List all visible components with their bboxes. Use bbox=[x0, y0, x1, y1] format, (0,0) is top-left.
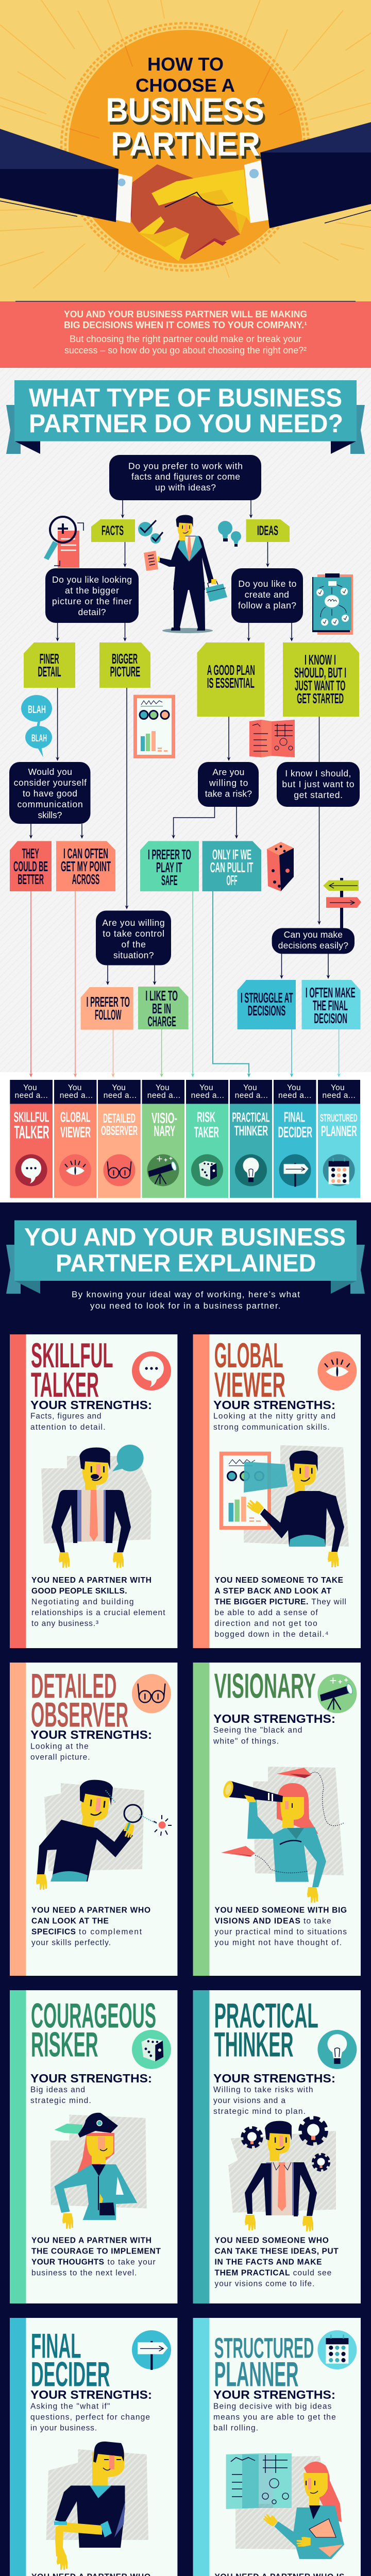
strengths text bbox=[30, 2072, 152, 2105]
question: take control: Are you willing bbox=[102, 918, 165, 928]
result: skillful talker: SKILLFUL bbox=[14, 1109, 49, 1125]
question: take control: situation? bbox=[113, 950, 154, 960]
partner advice text: to take your bbox=[107, 2258, 156, 2267]
result: final decider: You bbox=[287, 1083, 301, 1092]
result: risk taker bbox=[186, 1080, 228, 1198]
question: take a risk: take a risk? bbox=[205, 788, 252, 799]
answer: struggle at decisions: DECISIONS bbox=[248, 1003, 285, 1019]
answer: ideas: IDEAS bbox=[257, 522, 278, 538]
strengths text: in your business. bbox=[30, 2424, 97, 2433]
question: decisions easily: decisions easily? bbox=[278, 940, 348, 951]
answer: a good plan: IS ESSENTIAL bbox=[207, 675, 255, 691]
question: create and follow a plan: create and bbox=[245, 589, 289, 600]
card heading: FINAL bbox=[31, 2326, 81, 2365]
strengths text: Looking at the nitty gritty and bbox=[213, 1412, 335, 1421]
question: communication skills bbox=[9, 762, 91, 824]
strengths text: YOUR STRENGTHS: bbox=[30, 1398, 152, 1412]
banner: what type of partner: PARTNER DO YOU NEED? bbox=[29, 409, 343, 438]
answer: ideas bbox=[246, 519, 290, 542]
partner advice text bbox=[31, 1906, 150, 1947]
card heading bbox=[31, 2326, 110, 2394]
result: risk taker: RISK bbox=[197, 1109, 215, 1125]
illustration: man thinking bbox=[46, 2442, 148, 2570]
partner advice text: GOOD PEOPLE SKILLS. bbox=[31, 1587, 127, 1596]
answer: they could be better: THEY bbox=[22, 845, 39, 861]
result: global viewer: VIEWER bbox=[60, 1124, 91, 1141]
explained intro text: you need to look for in a business partner. bbox=[90, 1301, 281, 1311]
answer: bigger picture: PICTURE bbox=[110, 664, 140, 680]
question: take control bbox=[96, 911, 171, 965]
answer: they could be better: BETTER bbox=[18, 871, 44, 887]
strengths text: Facts, figures and bbox=[30, 1412, 101, 1421]
answer: play it safe: I PREFER TO bbox=[148, 846, 191, 862]
partner advice text: IN THE FACTS AND MAKE bbox=[214, 2258, 322, 2267]
card: courageous risker bbox=[10, 1990, 177, 2303]
card: skillful talker: SKILLFUL bbox=[31, 1336, 113, 1375]
result: practical thinker: THINKER bbox=[234, 1123, 268, 1139]
strengths text bbox=[213, 2072, 335, 2116]
partner advice text: be able to add a sense of bbox=[214, 1608, 318, 1617]
answer: just want to get started bbox=[283, 642, 359, 717]
question: facts or ideas: up with ideas? bbox=[155, 482, 216, 493]
card heading bbox=[31, 1336, 113, 1404]
question: know I should: but I just want to bbox=[282, 779, 355, 789]
illustration: presenter with chart bbox=[220, 1445, 349, 1567]
question: bigger picture or finer detail: at the bigger bbox=[65, 585, 119, 596]
question: take control: to take control bbox=[103, 928, 164, 939]
intro band: But choosing the right partner could make or break your bbox=[70, 334, 301, 344]
hero dotted ring bbox=[61, 23, 309, 270]
icon: light bulbs bbox=[218, 521, 241, 547]
result: skillful talker bbox=[10, 1080, 53, 1198]
strengths text: attention to detail. bbox=[30, 1423, 105, 1432]
card heading: RISKER bbox=[31, 2025, 98, 2064]
question: know I should: get started. bbox=[294, 790, 343, 800]
flowchart background bbox=[0, 368, 371, 1072]
partner advice text bbox=[214, 2236, 339, 2289]
card: global viewer: GLOBAL bbox=[214, 1336, 283, 1375]
explained intro text: By knowing your ideal way of working, here’s what bbox=[72, 1290, 300, 1299]
strengths text: YOUR STRENGTHS: bbox=[30, 2388, 152, 2401]
strengths text bbox=[30, 2388, 152, 2433]
answer: a good plan: A GOOD PLAN bbox=[207, 662, 255, 678]
hero sunburst rays bbox=[0, 0, 371, 289]
results background bbox=[0, 1072, 371, 1202]
result: risk taker: TAKER bbox=[194, 1124, 219, 1141]
question: facts or ideas: facts and figures or come bbox=[131, 471, 240, 482]
question: bigger picture or finer detail bbox=[45, 568, 139, 623]
partner advice text: YOU NEED SOMEONE WHO bbox=[214, 2236, 329, 2245]
result: visionary bbox=[142, 1080, 184, 1198]
strengths text: Seeing the "black and bbox=[213, 1726, 302, 1735]
strengths text: strong communication skills. bbox=[213, 1423, 330, 1432]
partner advice text: bogged down in the detail.⁴ bbox=[214, 1630, 328, 1639]
partner advice text bbox=[31, 2236, 161, 2277]
partner advice text: THEM PRACTICAL bbox=[214, 2269, 290, 2277]
result: risk taker: You bbox=[199, 1083, 213, 1092]
card heading: TALKER bbox=[31, 1365, 99, 1404]
answer: finer detail: DETAIL bbox=[38, 664, 61, 680]
strengths text: white" of things. bbox=[213, 1737, 279, 1745]
strengths text: YOUR STRENGTHS: bbox=[213, 1712, 335, 1725]
icon: clipboard plan bbox=[312, 573, 353, 635]
card icon bbox=[132, 2030, 171, 2069]
strengths text: Looking at the bbox=[30, 1742, 89, 1751]
hero inner rays bbox=[70, 46, 296, 138]
result: detailed observer: You bbox=[112, 1083, 126, 1092]
icon: report chart bbox=[133, 695, 175, 758]
answer: only if we can pull it off: OFF bbox=[227, 872, 238, 888]
hero orange circle bbox=[69, 30, 302, 264]
card icon bbox=[317, 1674, 357, 1713]
answer: like to be in charge: I LIKE TO bbox=[145, 988, 178, 1004]
flow arrowheads bbox=[29, 514, 330, 985]
main title: PARTNER bbox=[113, 128, 262, 166]
partner advice text bbox=[31, 1576, 165, 1628]
card: courageous risker: COURAGEOUS bbox=[31, 1996, 156, 2035]
banner: partner explained: PARTNER EXPLAINED bbox=[56, 1250, 316, 1277]
partner advice text bbox=[214, 1906, 347, 1947]
strengths text: strategic mind to plan. bbox=[213, 2107, 306, 2116]
partner advice text: to take bbox=[303, 1917, 331, 1926]
question: communication skills: Would you bbox=[28, 767, 72, 777]
result: detailed observer: OBSERVER bbox=[101, 1124, 138, 1138]
illustration: woman in hat bbox=[50, 2113, 147, 2229]
result: detailed observer: need a... bbox=[104, 1091, 137, 1100]
result: visionary: VISIO- bbox=[151, 1110, 177, 1127]
answer: get my point across: GET MY POINT bbox=[61, 858, 111, 874]
answer: like to be in charge bbox=[138, 987, 189, 1029]
question: bigger picture or finer detail: picture or the finer bbox=[52, 596, 132, 606]
partner advice text: to any business.³ bbox=[31, 1619, 98, 1628]
flow connector lines bbox=[31, 500, 339, 1075]
answer: a good plan bbox=[197, 642, 265, 717]
handshake illustration bbox=[130, 164, 250, 261]
card: final decider bbox=[10, 2318, 177, 2576]
result: skillful talker: You bbox=[23, 1083, 37, 1092]
explained intro text bbox=[72, 1290, 300, 1311]
strengths text: your visions and a bbox=[213, 2096, 285, 2105]
result: final decider: FINAL bbox=[284, 1109, 305, 1125]
partner advice text: to complement bbox=[79, 1928, 142, 1936]
result: final decider: need a... bbox=[278, 1091, 311, 1100]
card heading: THINKER bbox=[214, 2025, 294, 2064]
answer: prefer to follow bbox=[81, 987, 133, 1030]
question: decisions easily bbox=[272, 928, 355, 954]
strengths text: means you are able to get the bbox=[213, 2413, 336, 2421]
partner advice text: THE BIGGER PICTURE. bbox=[214, 1598, 308, 1606]
partner advice text: CAN TAKE THESE IDEAS, PUT bbox=[214, 2247, 339, 2256]
answer: make the final decision bbox=[302, 980, 361, 1029]
strengths text: Willing to take risks with bbox=[213, 2086, 313, 2094]
card: structured planner bbox=[193, 2318, 361, 2576]
result: practical thinker bbox=[230, 1080, 272, 1198]
card: detailed observer bbox=[10, 1663, 177, 1976]
strengths text: YOUR STRENGTHS: bbox=[213, 2072, 335, 2085]
card heading bbox=[214, 2331, 314, 2394]
partner advice text: YOU NEED A PARTNER WITH bbox=[31, 2236, 151, 2245]
partner advice text: you might not have thought of. bbox=[214, 1938, 342, 1947]
question: take a risk: Are you bbox=[212, 767, 244, 777]
answer: play it safe: SAFE bbox=[161, 872, 177, 888]
answer: facts bbox=[91, 519, 135, 542]
intro band bbox=[0, 301, 371, 368]
result: skillful talker: need a... bbox=[14, 1091, 48, 1100]
partner advice text: YOUR THOUGHTS bbox=[31, 2258, 104, 2267]
question: communication skills: to have good bbox=[23, 788, 77, 799]
right sleeve bbox=[244, 122, 371, 228]
card icon bbox=[132, 1674, 171, 1713]
main title: HOW TO bbox=[147, 54, 224, 75]
question: take a risk bbox=[198, 762, 259, 807]
partner advice text: SPECIFICS bbox=[31, 1928, 76, 1936]
question: facts or ideas bbox=[109, 455, 261, 500]
icon: folded map plan bbox=[249, 720, 295, 757]
card icon bbox=[132, 2330, 171, 2370]
question: know I should bbox=[277, 762, 360, 807]
strengths text bbox=[30, 1728, 152, 1761]
card heading bbox=[31, 1996, 156, 2064]
result: practical thinker: You bbox=[243, 1083, 257, 1092]
figure: businessman bbox=[144, 515, 227, 633]
partner advice text: your practical mind to situations bbox=[214, 1928, 347, 1936]
result: global viewer: need a... bbox=[60, 1091, 93, 1100]
banner: partner explained: YOU AND YOUR BUSINESS bbox=[24, 1224, 346, 1251]
answer: only if we can pull it off bbox=[203, 841, 261, 891]
partner advice text: CAN LOOK AT THE bbox=[31, 1917, 109, 1926]
result: visionary: You bbox=[156, 1083, 170, 1092]
question: bigger picture or finer detail: Do you like looking bbox=[52, 574, 132, 585]
result: final decider bbox=[274, 1080, 316, 1198]
strengths text: YOUR STRENGTHS: bbox=[213, 1398, 335, 1412]
card heading: DECIDER bbox=[31, 2354, 110, 2394]
answer: prefer to follow: FOLLOW bbox=[95, 1007, 122, 1023]
result: structured planner bbox=[318, 1080, 360, 1198]
strengths text bbox=[30, 1398, 152, 1432]
answer: they could be better bbox=[10, 841, 52, 891]
partner advice text: YOU NEED SOMEONE WITH BIG bbox=[214, 1906, 347, 1914]
partner advice text: YOU NEED A PARTNER WITH bbox=[31, 1576, 151, 1585]
result: global viewer: GLOBAL bbox=[60, 1109, 90, 1125]
banner: partner explained bbox=[6, 1221, 365, 1294]
question: create and follow a plan: follow a plan? bbox=[238, 600, 296, 611]
strengths text: overall picture. bbox=[30, 1753, 90, 1761]
answer: prefer to follow: I PREFER TO bbox=[87, 994, 130, 1010]
result arrow tips bbox=[29, 1073, 341, 1077]
card: practical thinker bbox=[193, 1990, 361, 2303]
icon: red dice bbox=[267, 842, 294, 891]
answer: just want to get started: I KNOW I bbox=[305, 652, 336, 668]
card icon bbox=[317, 2030, 357, 2069]
icon: magnifier over document bbox=[44, 517, 83, 568]
card icon bbox=[317, 1351, 357, 1391]
strengths text: questions, perfect for change bbox=[30, 2413, 150, 2421]
result: structured planner: need a... bbox=[323, 1091, 356, 1100]
icon: check marks bbox=[138, 520, 163, 544]
question: communication skills: skills? bbox=[38, 810, 62, 820]
answer: only if we can pull it off: ONLY IF WE bbox=[212, 846, 251, 862]
partner advice text: relationships is a crucial element bbox=[31, 1608, 165, 1617]
card: skillful talker bbox=[10, 1334, 177, 1648]
partner advice text: your visions come to life. bbox=[214, 2279, 314, 2289]
question: create and follow a plan: Do you like to bbox=[238, 579, 296, 589]
result connector stubs bbox=[31, 1071, 339, 1075]
answer: get my point across: I CAN OFTEN bbox=[63, 845, 108, 861]
partner advice text: business to the next level. bbox=[31, 2269, 137, 2277]
strengths text: Big ideas and bbox=[30, 2086, 85, 2094]
card icon bbox=[132, 1351, 171, 1391]
icon: signpost bbox=[323, 878, 361, 928]
hero section background bbox=[0, 0, 371, 301]
illustration: thinker with gears bbox=[228, 2120, 336, 2231]
result: detailed observer: DETAILED bbox=[103, 1111, 136, 1126]
illustration: man with magnifier bbox=[36, 1778, 172, 1890]
card heading bbox=[31, 1666, 128, 1734]
card heading: VIEWER bbox=[214, 1365, 285, 1404]
result: risk taker: need a... bbox=[191, 1091, 224, 1100]
answer: play it safe: PLAY IT bbox=[156, 859, 182, 875]
answer: only if we can pull it off: CAN PULL IT bbox=[210, 859, 253, 875]
question: know I should: I know I should, bbox=[285, 768, 351, 778]
left sleeve bbox=[0, 129, 132, 223]
intro band: success – so how do you go about choosing the right one?² bbox=[64, 345, 307, 355]
main title bbox=[106, 54, 266, 166]
answer: they could be better: COULD BE bbox=[13, 858, 48, 874]
question: communication skills: consider yourself bbox=[14, 777, 87, 788]
main title: CHOOSE A bbox=[136, 75, 235, 96]
answer: finer detail: FINER bbox=[40, 651, 59, 667]
partner advice text: THE COURAGE TO IMPLEMENT bbox=[31, 2247, 161, 2256]
card heading: DETAILED bbox=[31, 1666, 116, 1705]
strengths text: Being decisive with big ideas bbox=[213, 2402, 332, 2411]
illustration: woman with telescope bbox=[221, 1767, 344, 1903]
result: global viewer: You bbox=[68, 1083, 81, 1092]
answer: get my point across: ACROSS bbox=[72, 871, 99, 887]
partner advice text: Negotiating and building bbox=[31, 1598, 134, 1606]
partner advice text: YOU NEED A PARTNER WHO bbox=[31, 1906, 150, 1914]
card heading bbox=[214, 1996, 318, 2064]
question: take control: of the bbox=[122, 939, 146, 950]
answer: facts: FACTS bbox=[102, 522, 124, 538]
icon: blah speech bubbles: BLAH bbox=[28, 704, 46, 716]
answer: struggle at decisions: I STRUGGLE AT bbox=[241, 990, 293, 1006]
illustration: woman with plan bbox=[226, 2453, 344, 2559]
answer: bigger picture: BIGGER bbox=[112, 651, 138, 667]
main title: BUSINESS bbox=[108, 94, 266, 132]
banner: what type of partner: WHAT TYPE OF BUSINESS bbox=[29, 383, 342, 412]
question: communication skills: communication bbox=[18, 799, 83, 809]
illustration: talker man bbox=[41, 1445, 151, 1568]
icon: blah speech bubbles: BLAH bbox=[31, 733, 47, 744]
strengths text bbox=[213, 2388, 336, 2433]
strengths text: ball rolling. bbox=[213, 2424, 258, 2433]
partner advice text: direction and not get too bbox=[214, 1619, 317, 1628]
strengths text: YOUR STRENGTHS: bbox=[30, 1728, 152, 1741]
partner advice text: They will bbox=[311, 1598, 346, 1606]
answer: like to be in charge: BE IN bbox=[152, 1001, 171, 1016]
banner: what type of partner bbox=[6, 380, 365, 454]
question: take a risk: willing to bbox=[209, 778, 248, 788]
result: global viewer bbox=[54, 1080, 96, 1198]
card: detailed observer: OBSERVER bbox=[31, 1695, 128, 1734]
intro band: BIG DECISIONS WHEN IT COMES TO YOUR COMPANY.¹ bbox=[64, 320, 307, 330]
result: practical thinker: PRACTICAL bbox=[232, 1110, 270, 1125]
partner advice text: VISIONS AND IDEAS bbox=[214, 1917, 300, 1926]
answer: struggle at decisions bbox=[238, 980, 296, 1029]
strengths text: YOUR STRENGTHS: bbox=[213, 2388, 335, 2401]
intro band: YOU AND YOUR BUSINESS PARTNER WILL BE MAKING bbox=[64, 309, 307, 319]
main title: PARTNER bbox=[111, 125, 260, 163]
question: bigger picture or finer detail: detail? bbox=[78, 607, 106, 617]
result: visionary: NARY bbox=[154, 1123, 175, 1140]
icon: blah speech bubbles bbox=[21, 695, 52, 757]
strengths text bbox=[213, 1712, 335, 1745]
result: visionary: need a... bbox=[147, 1091, 180, 1100]
partner advice text: YOU NEED SOMEONE TO TAKE bbox=[214, 1576, 343, 1585]
result: detailed observer bbox=[98, 1080, 141, 1198]
answer: finer detail bbox=[24, 642, 75, 688]
strengths text: strategic mind. bbox=[30, 2096, 91, 2105]
strengths text: YOUR STRENGTHS: bbox=[30, 2072, 152, 2085]
strengths text bbox=[213, 1398, 335, 1432]
result: practical thinker: need a... bbox=[235, 1091, 268, 1100]
partner advice text: A STEP BACK AND LOOK AT bbox=[214, 1587, 332, 1596]
question: create and follow a plan bbox=[231, 568, 303, 623]
card: global viewer bbox=[193, 1334, 361, 1648]
partner advice text bbox=[214, 1576, 346, 1639]
question: facts or ideas: Do you prefer to work with bbox=[128, 461, 243, 471]
partner advice text: your skills perfectly. bbox=[31, 1938, 111, 1947]
strengths text: Asking the "what if" bbox=[30, 2402, 110, 2411]
result: skillful talker: TALKER bbox=[14, 1123, 49, 1143]
partner advice text: could see bbox=[293, 2269, 331, 2277]
answer: play it safe bbox=[140, 841, 199, 891]
result: structured planner: You bbox=[331, 1083, 345, 1092]
answer: like to be in charge: CHARGE bbox=[148, 1013, 176, 1029]
main title: BUSINESS bbox=[106, 91, 264, 129]
question: decisions easily: Can you make bbox=[284, 929, 343, 940]
answer: get my point across bbox=[56, 841, 115, 891]
result: final decider: DECIDER bbox=[278, 1124, 312, 1141]
answer: bigger picture bbox=[99, 642, 150, 688]
card: visionary bbox=[193, 1663, 361, 1976]
card icon bbox=[317, 2330, 357, 2369]
card heading bbox=[214, 1336, 285, 1404]
explained section background bbox=[0, 1202, 371, 2576]
